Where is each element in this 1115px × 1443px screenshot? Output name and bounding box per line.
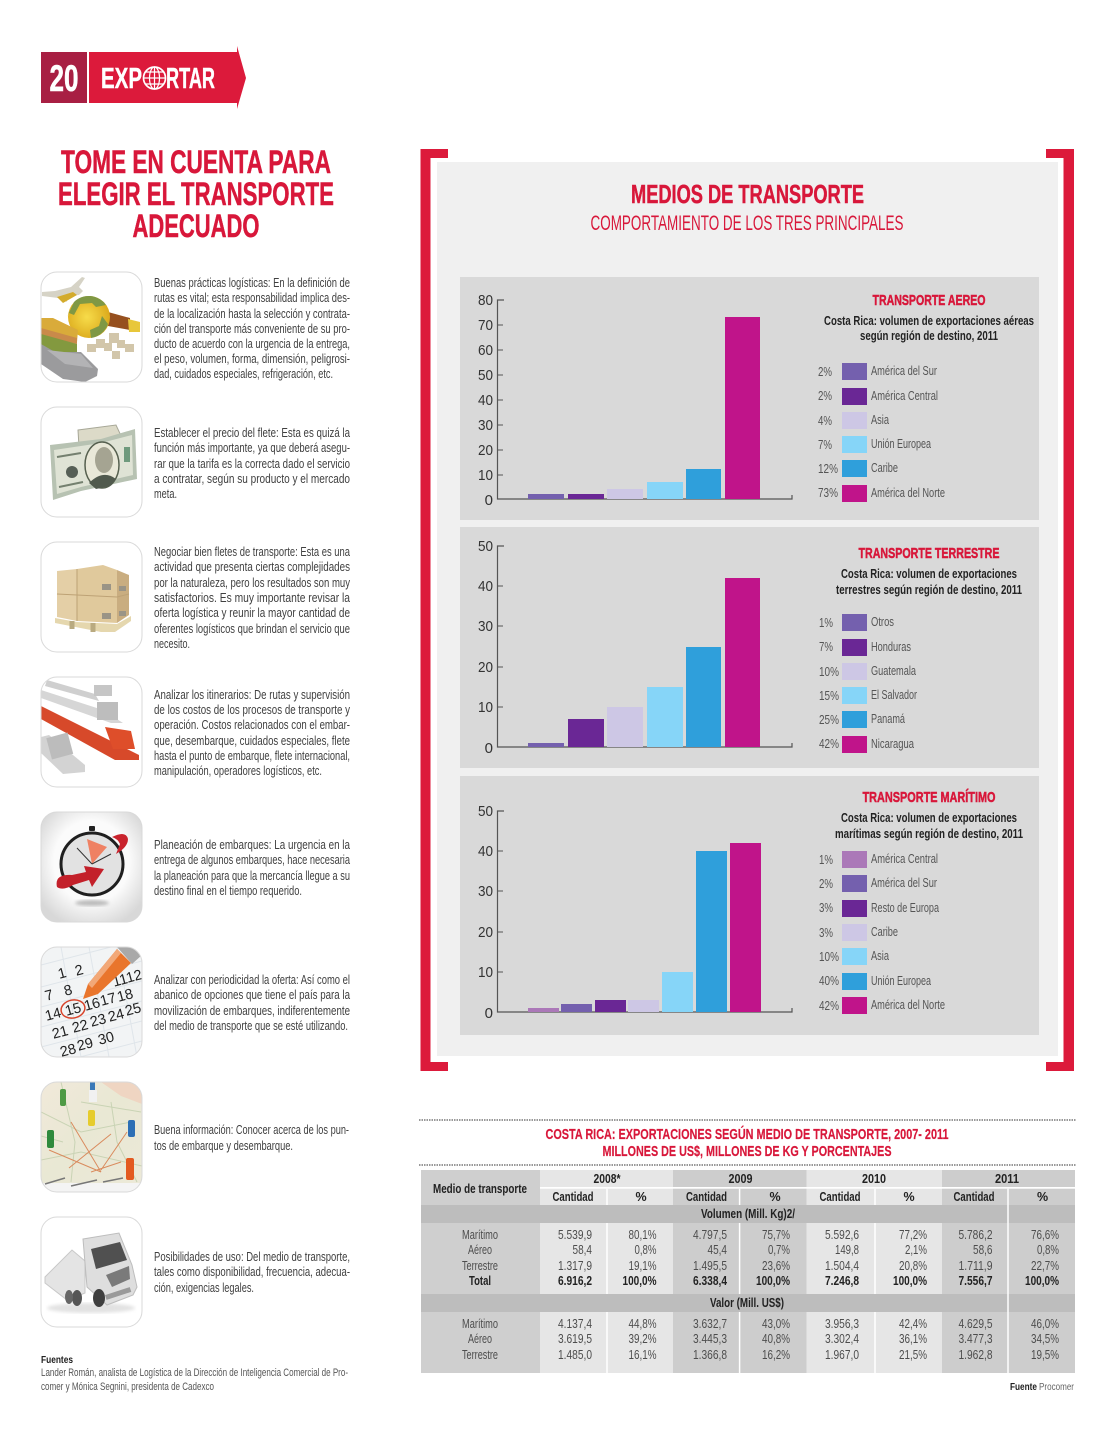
legend: 12% xyxy=(818,462,838,476)
text: negotiate freight: actividad que presenta ciertas complejidades xyxy=(154,560,350,574)
axes: 50 xyxy=(478,538,493,555)
text: possibilities of use: ción, exigencias legales. xyxy=(154,1281,254,1295)
value values: 39,2% xyxy=(628,1332,656,1346)
sources note xyxy=(41,1354,348,1393)
volume values: 77,2% xyxy=(899,1228,927,1242)
chart panel: sea transport xyxy=(460,776,1039,1035)
row labels xyxy=(462,1228,498,1362)
icon: calendar and pencil: 15 xyxy=(63,1000,83,1020)
axes: 20 xyxy=(478,924,493,941)
text: possibilities of use: Posibilidades de uso: Del medio de transporte, xyxy=(154,1250,350,1264)
text: analyse the offer: abanico de opciones que tiene el país para la xyxy=(154,988,350,1002)
icon: stopwatch xyxy=(41,812,142,922)
legend xyxy=(819,851,945,1014)
icon: calendar and pencil: 28 xyxy=(58,1041,78,1061)
legend: América del Sur xyxy=(871,364,937,378)
icon: itinerary arrows xyxy=(42,680,139,774)
bars xyxy=(528,843,761,1012)
icon: calendar and pencil: 23 xyxy=(88,1011,108,1031)
axes: 10 xyxy=(478,964,493,981)
axes: 40 xyxy=(478,843,493,860)
border: icon 6 xyxy=(41,947,142,1057)
legend: Unión Europea xyxy=(871,437,931,451)
table heading: COSTA RICA: EXPORTACIONES SEGÚN MEDIO DE TRANSPORTE, 2007- 2011 xyxy=(546,1125,948,1143)
legend: 3% xyxy=(819,901,833,915)
volume values: 7.556,7 xyxy=(958,1274,993,1288)
heading: TRANSPORTE TERRESTRE xyxy=(858,545,1000,562)
row labels: Terrestre xyxy=(462,1348,498,1362)
text: logistics practices xyxy=(154,276,350,381)
value values: 3.632,7 xyxy=(693,1317,727,1331)
axes: 10 xyxy=(478,699,493,716)
icon: calendar and pencil xyxy=(42,948,142,1056)
axes: 30 xyxy=(478,618,493,635)
sources note: Lander Román, analista de Logística de la Dirección de Inteligencia Comercial de Pro- xyxy=(41,1367,348,1379)
axes xyxy=(478,803,792,1022)
volume values: 45,4 xyxy=(708,1243,727,1257)
legend: 2% xyxy=(818,389,832,403)
text: logistics practices: Buenas prácticas logísticas: En la definición de xyxy=(154,276,350,290)
icon: calendar and pencil: 12 xyxy=(124,967,144,987)
text: itineraries: operación. Costos relacionados con el embar- xyxy=(154,718,350,732)
value values: 1.485,0 xyxy=(558,1348,592,1362)
legend: Resto de Europa xyxy=(871,901,939,915)
volume values: 19,1% xyxy=(628,1259,656,1273)
axes: 20 xyxy=(478,659,493,676)
volume values: 0,8% xyxy=(634,1243,656,1257)
legend: 7% xyxy=(818,438,832,452)
value values: 16,1% xyxy=(628,1348,656,1362)
bars xyxy=(528,317,760,499)
axes xyxy=(478,292,792,509)
table header: Cantidad xyxy=(820,1190,860,1204)
row labels: Total xyxy=(469,1274,491,1288)
text: logistics practices: de la localización hasta la selección y contrata- xyxy=(154,307,350,321)
icon: calendar and pencil: 21 xyxy=(50,1023,70,1043)
table header: 2010 xyxy=(862,1172,886,1186)
volume values: 20,8% xyxy=(899,1259,927,1273)
table heading xyxy=(546,1125,948,1160)
table header: Volumen (Mill. Kg)2/ xyxy=(701,1207,795,1221)
legend: 15% xyxy=(819,689,839,703)
volume values xyxy=(558,1228,1059,1288)
volume values: 7.246,8 xyxy=(825,1274,859,1288)
legend: América del Sur xyxy=(871,876,937,890)
icon: calendar and pencil: 30 xyxy=(96,1029,116,1049)
text: itineraries: de los costos de los procesos de transporte y xyxy=(154,703,351,717)
legend: América del Norte xyxy=(871,486,945,500)
legend: 10% xyxy=(819,665,839,679)
legend: 1% xyxy=(819,853,833,867)
table header: 2008* xyxy=(594,1172,621,1186)
header: section banner xyxy=(41,46,246,109)
table header: 2009 xyxy=(728,1172,753,1186)
volume values: 1.495,5 xyxy=(693,1259,727,1273)
text: freight price: Establecer el precio del flete: Esta es quizá la xyxy=(154,426,350,440)
text: analyse the offer: movilización de embarques, indiferentemente xyxy=(154,1004,350,1018)
legend: Nicaragua xyxy=(871,737,914,751)
axes: 60 xyxy=(478,342,493,359)
chart panel: air transport xyxy=(460,277,1039,520)
legend: Asia xyxy=(871,413,889,427)
legend: 73% xyxy=(818,486,838,500)
legend: 2% xyxy=(819,877,833,891)
value values: 3.956,3 xyxy=(825,1317,859,1331)
volume values: 5.539,9 xyxy=(558,1228,592,1242)
text: negotiate freight: Negociar bien fletes de transporte: Esta es una xyxy=(154,545,350,559)
legend: Panamá xyxy=(871,712,905,726)
legend: Honduras xyxy=(871,640,911,654)
axes: 40 xyxy=(478,578,493,595)
text: negotiate freight: por la naturaleza, pero los resultados son muy xyxy=(154,576,351,590)
text: good information xyxy=(154,1123,349,1153)
text: freight price: a contratar, según su producto y el mercado xyxy=(154,472,350,486)
value values: 34,5% xyxy=(1031,1332,1059,1346)
heading: Costa Rica: volumen de exportaciones aéreas xyxy=(824,314,1034,328)
text: shipment planning xyxy=(154,838,350,898)
panel heading xyxy=(590,179,904,235)
text: shipment planning: la planeación para que la mercancía llegue a su xyxy=(154,869,350,883)
legend: Unión Europea xyxy=(871,974,931,988)
page number: 20 xyxy=(50,58,78,99)
legend: Caribe xyxy=(871,461,898,475)
axes: 0 xyxy=(485,1005,493,1022)
volume values: 1.504,4 xyxy=(825,1259,859,1273)
volume values: 5.592,6 xyxy=(825,1228,859,1242)
volume values: 22,7% xyxy=(1031,1259,1059,1273)
volume values: 100,0% xyxy=(893,1274,927,1288)
volume values: 1.317,9 xyxy=(558,1259,592,1273)
title: left column xyxy=(58,144,334,244)
axes: 30 xyxy=(478,417,493,434)
icon: map with pins xyxy=(41,1082,142,1192)
heading: Costa Rica: volumen de exportaciones xyxy=(841,811,1017,825)
table header: % xyxy=(1037,1190,1048,1204)
volume values: 1.711,9 xyxy=(958,1259,993,1273)
title: left column: ELEGIR EL TRANSPORTE xyxy=(58,176,334,212)
text: shipment planning: entrega de algunos embarques, hace necesaria xyxy=(154,853,350,867)
text: possibilities of use xyxy=(154,1250,350,1295)
value values: 1.366,8 xyxy=(693,1348,727,1362)
value values: 46,0% xyxy=(1031,1317,1059,1331)
icon: calendar and pencil: 17 xyxy=(98,990,118,1010)
border: icon 5 xyxy=(41,812,142,922)
text: itineraries: manipulación, operadores logísticos, etc. xyxy=(154,764,322,778)
row labels: Aéreo xyxy=(468,1243,492,1257)
value values: 19,5% xyxy=(1031,1348,1059,1362)
table header: Medio de transporte xyxy=(433,1182,527,1196)
text: freight price: rar que la tarifa es la correcta dado el servicio xyxy=(154,457,350,471)
heading: TRANSPORTE AEREO xyxy=(872,292,986,309)
section arrow label: EXP xyxy=(101,63,142,95)
legend: 1% xyxy=(819,616,833,630)
bars xyxy=(528,578,760,747)
table source: Fuente xyxy=(1010,1381,1037,1393)
text: good information: tos de embarque y desembarque. xyxy=(154,1139,293,1153)
axes: 30 xyxy=(478,883,493,900)
value values: 3.302,4 xyxy=(825,1332,859,1346)
legend: 40% xyxy=(819,974,839,988)
heading: TRANSPORTE MARÍTIMO xyxy=(862,789,996,806)
icon: calendar and pencil: 11 xyxy=(111,971,130,991)
legend: 42% xyxy=(819,737,839,751)
axes: 10 xyxy=(478,467,493,484)
table header: Cantidad xyxy=(954,1190,994,1204)
chart panel: land transport xyxy=(460,527,1039,768)
page number xyxy=(41,52,87,103)
volume values: 0,8% xyxy=(1037,1243,1059,1257)
volume values: 100,0% xyxy=(756,1274,790,1288)
icon: calendar and pencil: 2 xyxy=(73,962,85,980)
heading: terrestres según región de destino, 2011 xyxy=(836,583,1022,597)
table header xyxy=(433,1172,1048,1310)
legend xyxy=(819,614,917,753)
value values: 3.619,5 xyxy=(558,1332,592,1346)
row labels: Marítimo xyxy=(462,1317,498,1331)
legend: Otros xyxy=(871,615,894,629)
text: logistics practices: ción del transporte más conveniente de su pro- xyxy=(154,322,350,336)
title: left column: TOME EN CUENTA PARA xyxy=(61,144,331,180)
panel heading: COMPORTAMIENTO DE LOS TRES PRINCIPALES xyxy=(590,212,904,235)
icon: banknotes xyxy=(50,424,137,500)
volume values: 149,8 xyxy=(835,1243,859,1257)
icon: white truck xyxy=(44,1232,138,1314)
text: logistics practices: el peso, volumen, forma, dimensión, peligrosi- xyxy=(154,352,350,366)
heading xyxy=(836,545,1022,597)
text: analyse the offer: Analizar con periodicidad la oferta: Así como el xyxy=(154,973,350,987)
axes: 20 xyxy=(478,442,493,459)
legend: 10% xyxy=(819,950,839,964)
text: itineraries: hasta el punto de embarque, flete internacional, xyxy=(154,749,350,763)
icon: calendar and pencil: 22 xyxy=(70,1017,90,1037)
sources note: Fuentes xyxy=(41,1354,73,1366)
value values: 40,8% xyxy=(762,1332,790,1346)
icon: pallet of boxes xyxy=(55,565,131,632)
sources note: comer y Mónica Segnini, presidenta de Cadexco xyxy=(41,1381,214,1393)
value values: 43,0% xyxy=(762,1317,790,1331)
value values: 4.629,5 xyxy=(958,1317,993,1331)
legend: 7% xyxy=(819,640,833,654)
table backgrounds xyxy=(421,1170,1075,1373)
legend: América del Norte xyxy=(871,998,945,1012)
icon: calendar and pencil: 25 xyxy=(123,1000,143,1020)
volume values: 6.338,4 xyxy=(693,1274,727,1288)
icon: calendar and pencil: 1 xyxy=(56,965,68,983)
table header: Valor (Mill. US$) xyxy=(710,1296,784,1310)
text: logistics practices: dad, cuidados especiales, refrigeración, etc. xyxy=(154,367,333,381)
axes: 70 xyxy=(478,317,493,334)
icon: calendar and pencil: 16 xyxy=(82,995,102,1015)
volume values: 58,6 xyxy=(973,1243,993,1257)
section arrow label: RTAR xyxy=(166,63,215,95)
text: logistics practices: ducto de acuerdo con la urgencia de la entrega, xyxy=(154,337,350,351)
volume values: 58,4 xyxy=(572,1243,592,1257)
icon: calendar and pencil: 29 xyxy=(75,1035,95,1055)
heading xyxy=(835,789,1023,841)
text: good information: Buena información: Conocer acerca de los pun- xyxy=(154,1123,349,1137)
table header: % xyxy=(635,1190,647,1204)
text: negotiate freight: oferta logística y reunir la mayor cantidad de xyxy=(154,606,350,620)
value values: 16,2% xyxy=(762,1348,790,1362)
icon: plane, globe, truck and ship xyxy=(41,272,142,382)
volume values: 6.916,2 xyxy=(558,1274,592,1288)
text: freight price xyxy=(154,426,350,501)
row labels: Aéreo xyxy=(468,1332,492,1346)
value values: 3.477,3 xyxy=(958,1332,993,1346)
text: shipment planning: Planeación de embarques: La urgencia en la xyxy=(154,838,350,852)
table source: Procomer xyxy=(1039,1381,1074,1393)
text: negotiate freight: satisfactorios. Es muy importante revisar la xyxy=(154,591,350,605)
border: icon 8 xyxy=(41,1217,142,1327)
volume values: 75,7% xyxy=(762,1228,790,1242)
volume values: 76,6% xyxy=(1031,1228,1059,1242)
panel: means of transport xyxy=(420,149,1074,1071)
title: left column: ADECUADO xyxy=(132,208,260,244)
legend: América Central xyxy=(871,852,938,866)
heading xyxy=(824,292,1034,343)
legend: 4% xyxy=(818,414,832,428)
text: negotiate freight xyxy=(154,545,351,651)
volume values: 23,6% xyxy=(762,1259,790,1273)
table source xyxy=(1010,1381,1074,1393)
axes: 50 xyxy=(478,803,493,820)
legend: 3% xyxy=(819,926,833,940)
text: itineraries xyxy=(154,688,351,778)
axes: 0 xyxy=(485,740,493,757)
value values: 36,1% xyxy=(899,1332,927,1346)
text: itineraries: que, desembarque, cuidados especiales, flete xyxy=(154,734,350,748)
text: freight price: meta. xyxy=(154,487,177,501)
text: negotiate freight: necesito. xyxy=(154,637,190,651)
icon: calendar and pencil: 7 xyxy=(43,987,55,1005)
text: analyse the offer: del medio de transporte que se esté utilizando. xyxy=(154,1019,348,1033)
section arrow label xyxy=(89,46,246,109)
value values: 44,8% xyxy=(628,1317,656,1331)
icon: calendar and pencil: 24 xyxy=(106,1006,126,1026)
volume values: 100,0% xyxy=(622,1274,656,1288)
volume values: 4.797,5 xyxy=(693,1228,727,1242)
border: icon 3 xyxy=(41,542,142,652)
legend: 42% xyxy=(819,999,839,1013)
text: shipment planning: destino final en el tiempo requerido. xyxy=(154,884,302,898)
volume values: 80,1% xyxy=(628,1228,656,1242)
table heading: MILLONES DE US$, MILLONES DE KG Y PORCENTAJES xyxy=(602,1143,892,1160)
heading: según región de destino, 2011 xyxy=(860,329,998,343)
legend: América Central xyxy=(871,389,938,403)
value values: 3.445,3 xyxy=(693,1332,727,1346)
text: analyse the offer xyxy=(154,973,350,1033)
table header: Cantidad xyxy=(686,1190,727,1204)
axes: 50 xyxy=(478,367,493,384)
value values: 42,4% xyxy=(899,1317,927,1331)
value values: 21,5% xyxy=(899,1348,927,1362)
axes xyxy=(478,538,792,757)
table header: 2011 xyxy=(995,1172,1019,1186)
legend xyxy=(818,363,945,502)
left red bracket xyxy=(420,149,448,1071)
legend: Caribe xyxy=(871,925,898,939)
legend: Guatemala xyxy=(871,664,916,678)
value values xyxy=(558,1317,1059,1362)
axes: 80 xyxy=(478,292,493,309)
heading: marítimas según región de destino, 2011 xyxy=(835,827,1023,841)
table: exports by means of transport xyxy=(421,1170,1075,1373)
border: icon 2 xyxy=(41,407,142,517)
icon: calendar and pencil: 14 xyxy=(43,1005,63,1025)
axes: 40 xyxy=(478,392,493,409)
legend: 2% xyxy=(818,365,832,379)
section arrow label: O xyxy=(144,63,165,95)
text: freight price: función más importante, ya que deberá asegu- xyxy=(154,441,350,455)
table header: % xyxy=(903,1190,915,1204)
row labels: Marítimo xyxy=(462,1228,498,1242)
legend: El Salvador xyxy=(871,688,917,702)
icon: calendar and pencil: 18 xyxy=(115,986,135,1006)
table header: % xyxy=(769,1190,781,1204)
heading: Costa Rica: volumen de exportaciones xyxy=(841,567,1017,581)
volume values: 2,1% xyxy=(905,1243,927,1257)
table header: Cantidad xyxy=(552,1190,594,1204)
value values: 1.967,0 xyxy=(825,1348,859,1362)
value values: 4.137,4 xyxy=(558,1317,592,1331)
text: itineraries: Analizar los itinerarios: De rutas y supervisión xyxy=(154,688,350,702)
legend: Asia xyxy=(871,949,889,963)
border: icon 1 xyxy=(41,272,142,382)
volume values: 100,0% xyxy=(1025,1274,1059,1288)
row labels: Terrestre xyxy=(462,1259,498,1273)
right red bracket xyxy=(1046,149,1074,1071)
value values: 1.962,8 xyxy=(958,1348,993,1362)
volume values: 0,7% xyxy=(768,1243,790,1257)
panel heading: MEDIOS DE TRANSPORTE xyxy=(631,179,864,209)
volume values: 5.786,2 xyxy=(958,1228,993,1242)
border: icon 4 xyxy=(41,677,142,787)
text: logistics practices: rutas es vital; esta responsabilidad implica des- xyxy=(154,291,350,305)
icon: calendar and pencil: 8 xyxy=(62,982,74,1000)
border: icon 7 xyxy=(41,1082,142,1192)
legend: 25% xyxy=(819,713,839,727)
axes: 0 xyxy=(485,492,493,509)
text: negotiate freight: oferentes logísticos que brindan el servicio que xyxy=(154,622,350,636)
text: possibilities of use: tales como disponibilidad, frecuencia, adecua- xyxy=(154,1265,350,1279)
